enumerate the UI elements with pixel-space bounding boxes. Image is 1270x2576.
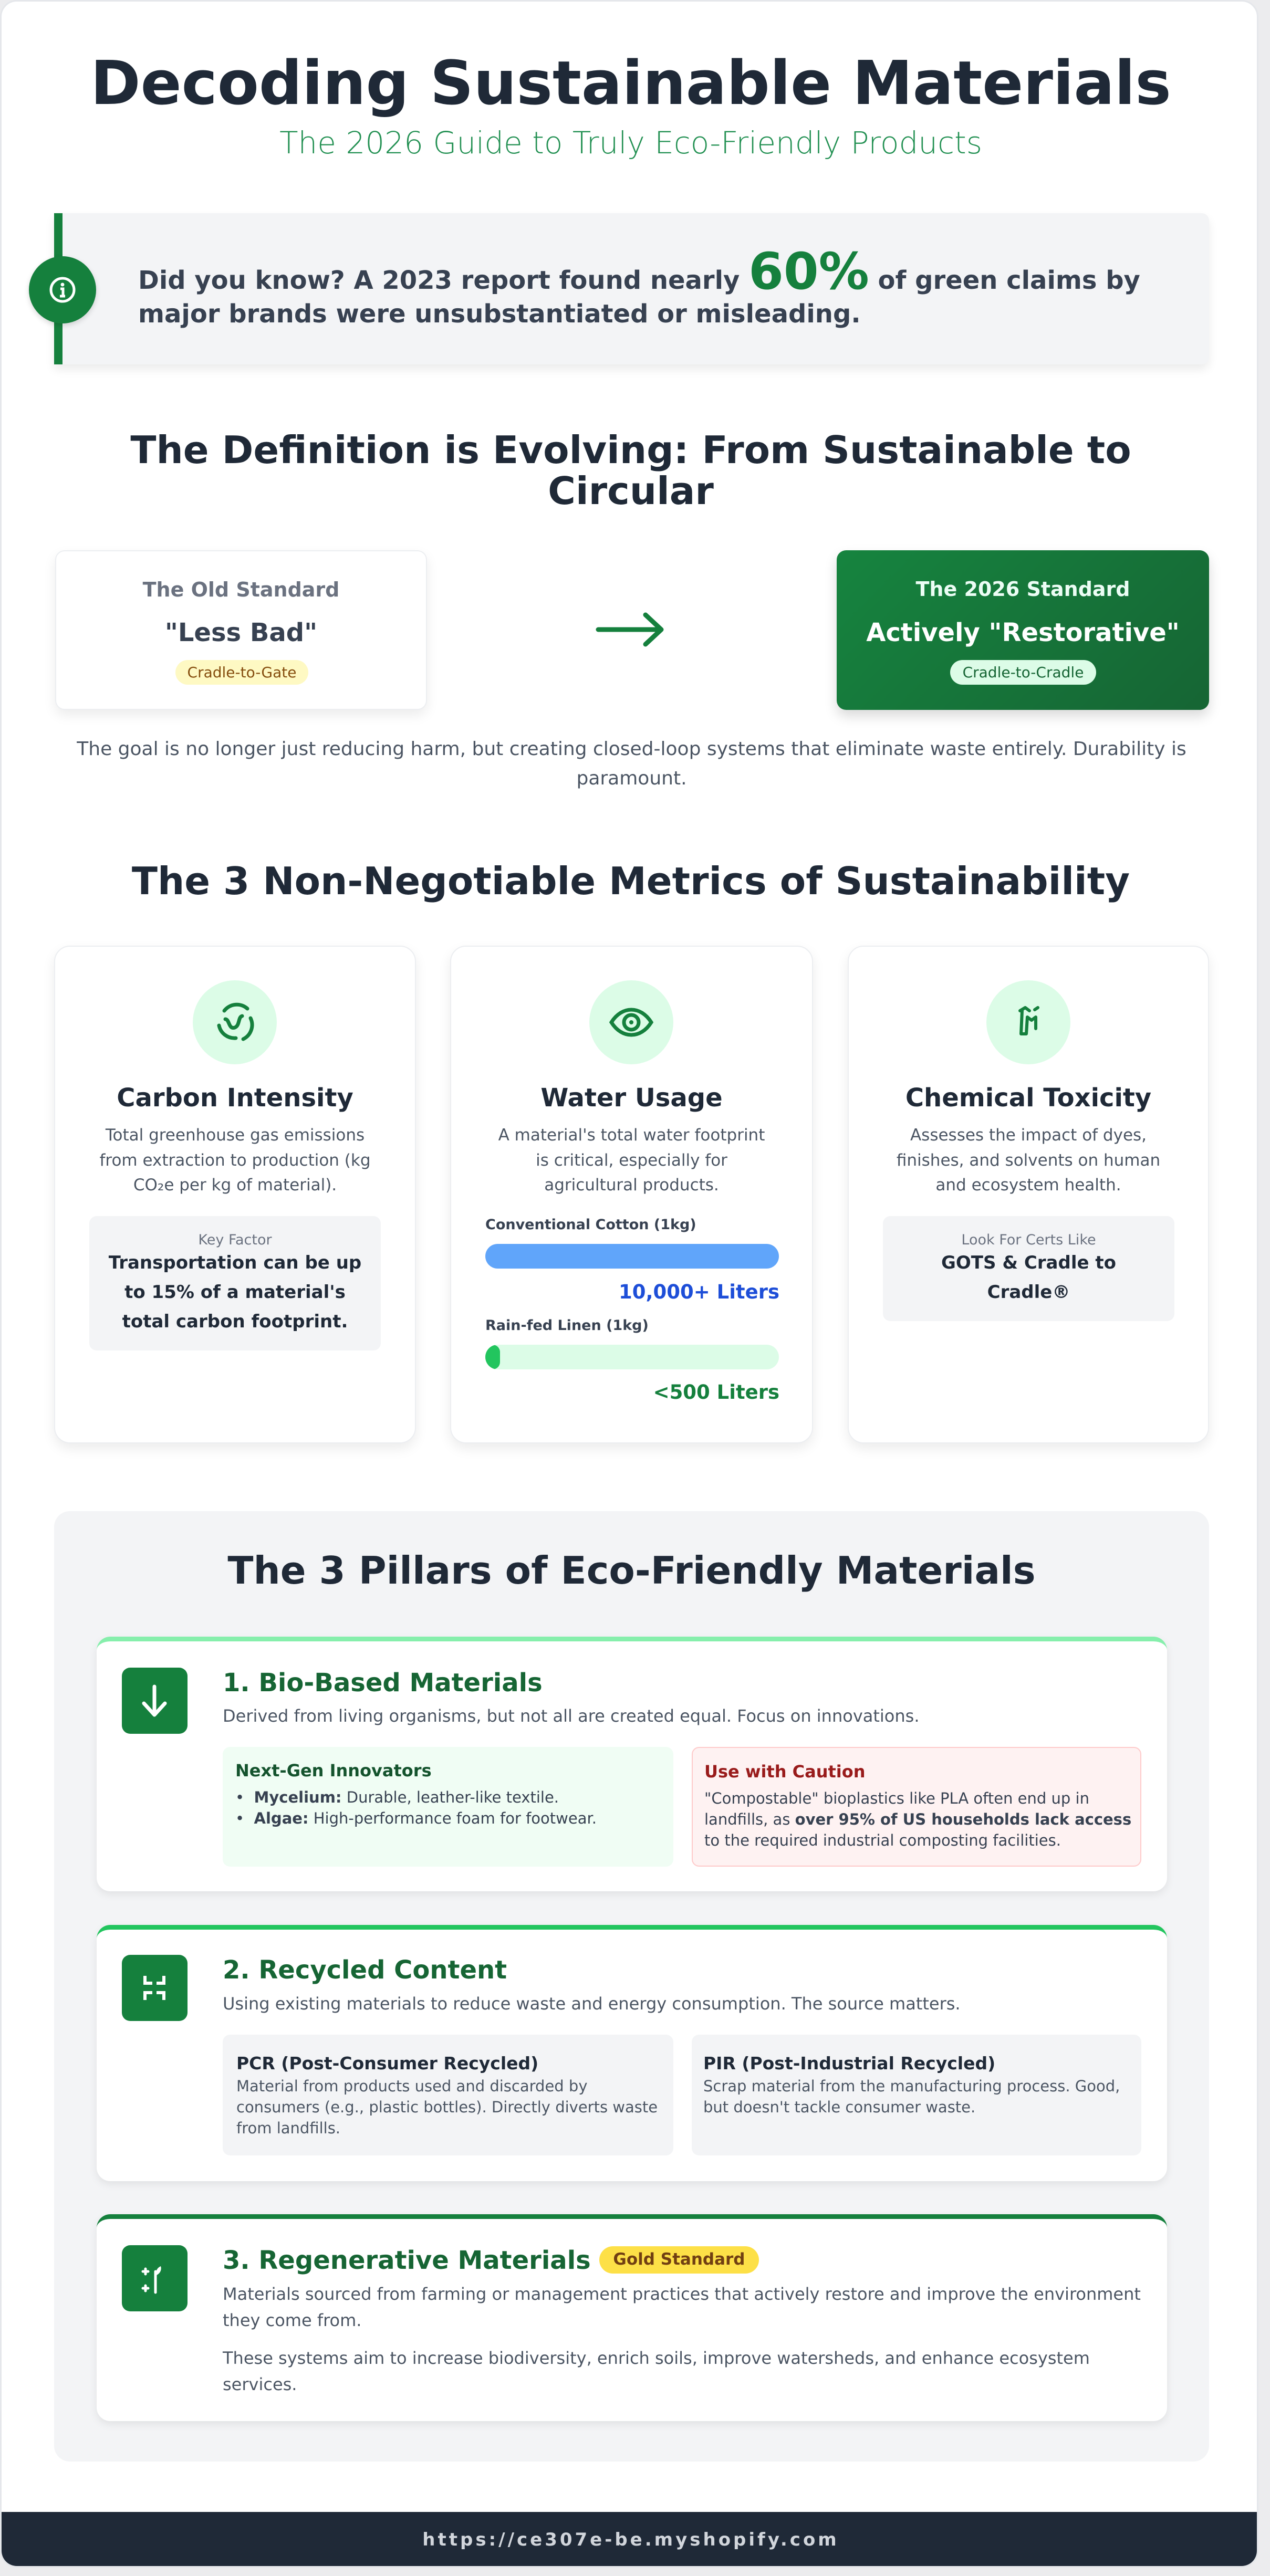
panel: water usage: Water Usage xyxy=(540,1083,723,1113)
callout text: major brands were unsubstantiated or misleading. xyxy=(138,299,861,329)
text: goal description: paramount. xyxy=(576,768,687,789)
arrow xyxy=(596,612,664,647)
box: PCR: from landfills. xyxy=(236,2119,340,2137)
box: PCR xyxy=(223,2035,673,2155)
box: use with caution: landfills, as over 95% of US households lack access xyxy=(704,1810,1131,1828)
icon: sprout xyxy=(122,2245,188,2311)
icon: eye xyxy=(589,980,673,1064)
bar chart: water: Rain-fed Linen (1kg) xyxy=(485,1317,649,1334)
panel: chemical toxicity xyxy=(848,946,1209,1443)
heading: definition: Circular xyxy=(548,469,714,513)
panel: chemical toxicity: and ecosystem health. xyxy=(935,1176,1121,1195)
box: next-gen innovators: • Algae: High-performance foam for footwear. xyxy=(235,1809,597,1827)
panel: carbon intensity xyxy=(54,946,416,1443)
panel: water usage xyxy=(450,946,813,1443)
cert box: GOTS & Cradle to xyxy=(941,1252,1116,1273)
pillar 2: recycled xyxy=(97,1925,1167,2181)
key factor box: Transportation can be up xyxy=(109,1252,361,1273)
box: PCR: consumers (e.g., plastic bottles). Directly diverts waste xyxy=(236,2098,658,2116)
icon: flask xyxy=(986,980,1070,1064)
box: next-gen innovators: • Mycelium: Durable, leather-like textile. xyxy=(235,1788,559,1806)
cert box xyxy=(883,1216,1174,1321)
key factor box: total carbon footprint. xyxy=(122,1311,348,1332)
pillar 1: bio-based: Derived from living organisms, but not all are created equal. Focus on innovations. xyxy=(223,1706,919,1726)
key factor box xyxy=(89,1216,381,1350)
panel: chemical toxicity: Assesses the impact of dyes, xyxy=(910,1126,1147,1145)
bar chart: water: Conventional Cotton (1kg) xyxy=(485,1217,696,1233)
panel: water usage: agricultural products. xyxy=(544,1176,719,1195)
box: PIR xyxy=(692,2035,1141,2155)
panel: water usage: A material's total water footprint xyxy=(498,1126,765,1145)
pillar 3: regenerative: they come from. xyxy=(223,2310,361,2330)
subtitle: The 2026 Guide to Truly Eco-Friendly Products xyxy=(279,125,982,161)
pillar 3: regenerative: Materials sourced from farming or management practices that actively restore and improve the environment xyxy=(223,2284,1141,2304)
panel: old standard: Cradle-to-Gate xyxy=(188,664,296,681)
pillar 3: regenerative: These systems aim to increase biodiversity, enrich soils, improve watersheds, and enhance ecosystem xyxy=(223,2348,1090,2368)
panel: water usage: is critical, especially for xyxy=(536,1151,727,1170)
callout text: Did you know? A 2023 report found nearly 60% of green claims by xyxy=(138,242,1140,301)
icon: carbon xyxy=(193,980,277,1064)
panel: old standard: "Less Bad" xyxy=(165,618,317,647)
box: PCR: PCR (Post-Consumer Recycled) xyxy=(236,2053,538,2074)
panel: carbon intensity: Total greenhouse gas emissions xyxy=(106,1126,365,1145)
box: use with caution: to the required industrial composting facilities. xyxy=(704,1831,1061,1849)
bar chart: water: 10,000+ Liters xyxy=(619,1281,779,1303)
panel: 2026 standard: The 2026 Standard xyxy=(916,578,1130,601)
box: next-gen innovators xyxy=(223,1747,673,1867)
panel: chemical toxicity: Chemical Toxicity xyxy=(905,1083,1151,1113)
bar chart: water: <500 Liters xyxy=(653,1381,779,1404)
panel: 2026 standard: Actively "Restorative" xyxy=(866,618,1180,647)
panel: old standard xyxy=(55,550,427,710)
box: PIR: but doesn't tackle consumer waste. xyxy=(703,2098,975,2116)
cert box: Look For Certs Like xyxy=(961,1232,1096,1248)
key factor box: to 15% of a material's xyxy=(124,1282,346,1303)
box: use with caution: Use with Caution xyxy=(704,1762,866,1782)
panel: carbon intensity: Carbon Intensity xyxy=(117,1083,353,1113)
pillar 3: regenerative: services. xyxy=(223,2374,297,2394)
title: Decoding Sustainable Materials xyxy=(90,48,1171,119)
box: use with caution: "Compostable" bioplastics like PLA often end up in xyxy=(704,1789,1089,1807)
box: PIR: Scrap material from the manufacturing process. Good, xyxy=(703,2077,1120,2095)
panel: old standard: The Old Standard xyxy=(143,578,339,601)
box: PIR: PIR (Post-Industrial Recycled) xyxy=(703,2053,995,2074)
heading: definition xyxy=(130,428,1131,513)
text: goal description: The goal is no longer just reducing harm, but creating closed-loop systems that eliminate waste entirely. Durability is xyxy=(77,738,1186,760)
text: goal description xyxy=(77,738,1186,789)
panel: pillars xyxy=(54,1511,1209,2462)
key factor box: Key Factor xyxy=(198,1232,272,1248)
pillar 3: regenerative: Gold Standard xyxy=(613,2250,745,2269)
footer: https://ce307e-be.myshopify.com xyxy=(422,2529,839,2550)
panel: 2026 standard: Cradle-to-Cradle xyxy=(963,664,1084,681)
panel: chemical toxicity: finishes, and solvents on human xyxy=(897,1151,1160,1170)
heading: pillars: The 3 Pillars of Eco-Friendly Materials xyxy=(227,1548,1036,1593)
heading: metrics: The 3 Non-Negotiable Metrics of Sustainability xyxy=(132,859,1130,903)
pillar 1: bio-based xyxy=(97,1637,1167,1891)
pillar 3: regenerative: 3. Regenerative Materials xyxy=(223,2246,591,2275)
box: use with caution xyxy=(692,1747,1141,1867)
bar chart: water xyxy=(485,1217,779,1404)
callout: did you know xyxy=(54,213,1209,364)
heading: definition: The Definition is Evolving: From Sustainable to xyxy=(130,428,1131,472)
icon: info xyxy=(29,256,96,323)
panel: 2026 standard xyxy=(837,550,1209,710)
box: next-gen innovators: Next-Gen Innovators xyxy=(235,1761,432,1781)
callout text xyxy=(138,242,1140,329)
pillar 2: recycled: 2. Recycled Content xyxy=(223,1955,507,1985)
icon: minimize xyxy=(122,1955,188,2021)
panel: carbon intensity: from extraction to production (kg xyxy=(99,1151,371,1170)
box: PCR: Material from products used and discarded by xyxy=(236,2077,587,2095)
cert box: Cradle® xyxy=(987,1282,1070,1303)
icon: arrow down xyxy=(122,1668,188,1734)
pillar 2: recycled: Using existing materials to reduce waste and energy consumption. The source matters. xyxy=(223,1994,961,2014)
panel: carbon intensity: CO₂e per kg of material). xyxy=(133,1176,337,1195)
footer xyxy=(2,2512,1260,2568)
pillar 3: regenerative xyxy=(97,2214,1167,2421)
pillar 1: bio-based: 1. Bio-Based Materials xyxy=(223,1668,543,1698)
